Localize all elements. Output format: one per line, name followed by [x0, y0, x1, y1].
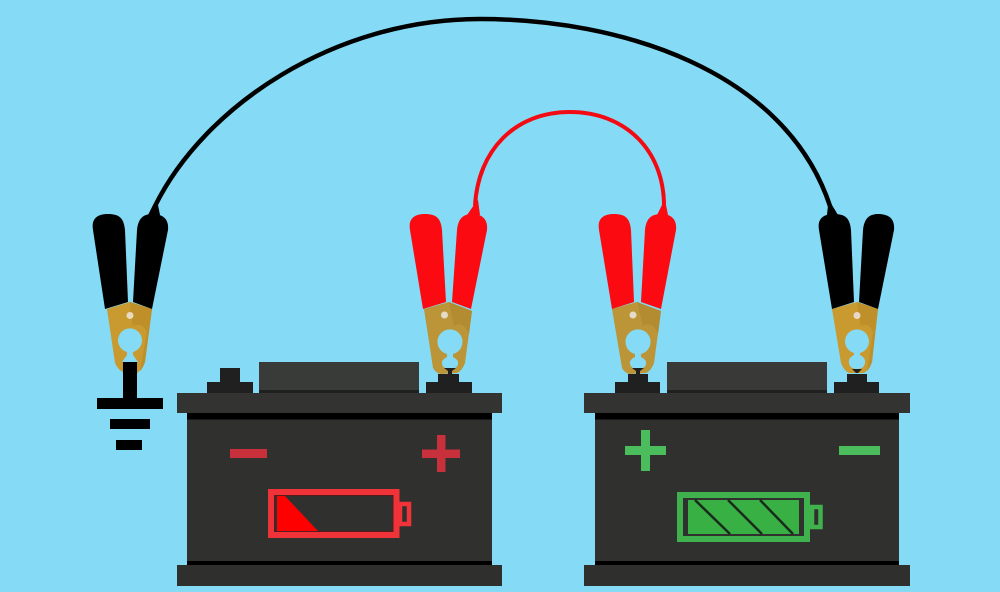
battery body [595, 413, 899, 566]
clamp jaw [832, 302, 878, 373]
negative terminal [834, 374, 879, 394]
lid [177, 393, 502, 413]
full charge icon [680, 495, 820, 539]
handle left [410, 214, 446, 309]
jaw shading [637, 302, 661, 334]
upper shadow strip [187, 413, 492, 420]
handle right [859, 214, 894, 309]
pivot pin [854, 312, 860, 319]
low charge icon [271, 492, 409, 535]
upper shadow strip [595, 413, 899, 420]
plus sign [422, 435, 460, 472]
plus sign [625, 430, 666, 471]
clamp: red, on discharged battery [410, 200, 487, 375]
black cable [155, 19, 830, 206]
battery: discharged [177, 362, 502, 586]
clamp: black, on charged battery [819, 205, 894, 373]
positive terminal [426, 374, 472, 394]
cable boot [148, 205, 160, 215]
handle left [819, 214, 854, 309]
pivot pin [630, 312, 636, 318]
battery: charged [584, 362, 910, 586]
cable boot [827, 205, 838, 215]
terminal tip [444, 368, 456, 375]
clamp jaw [612, 302, 661, 374]
handle right [452, 214, 487, 309]
negative terminal [207, 368, 253, 394]
battery body [187, 413, 492, 566]
lid [584, 393, 910, 413]
base [177, 565, 502, 586]
terminal tip [632, 368, 644, 375]
top cover block [667, 362, 827, 394]
jaw opening [845, 329, 869, 369]
cable boot [467, 200, 480, 215]
handle right [133, 214, 168, 309]
positive terminal [615, 374, 660, 394]
ground symbol [97, 362, 163, 450]
jaw opening [118, 328, 142, 362]
handle right [641, 214, 676, 309]
top cover block [259, 362, 419, 394]
base [584, 565, 910, 586]
red cable [475, 112, 664, 206]
pivot pin [441, 312, 448, 318]
cable boot [657, 200, 668, 215]
jaw shading [449, 302, 472, 334]
minus sign [839, 446, 880, 455]
clamp: black, on ground [93, 205, 168, 373]
lower shadow strip [187, 561, 492, 566]
jaw opening [626, 329, 650, 369]
lower shadow strip [595, 561, 899, 566]
jaw opening [438, 329, 462, 369]
clamp: red, on charged battery [599, 200, 676, 375]
pivot pin [126, 312, 134, 319]
clamp jaw [107, 302, 152, 373]
minus sign [230, 449, 267, 458]
handle left [599, 214, 634, 309]
jaw shading [130, 302, 152, 371]
jaw shading [857, 302, 878, 371]
handle left [93, 214, 128, 309]
terminal tip [852, 369, 862, 373]
clamp jaw [424, 302, 472, 374]
